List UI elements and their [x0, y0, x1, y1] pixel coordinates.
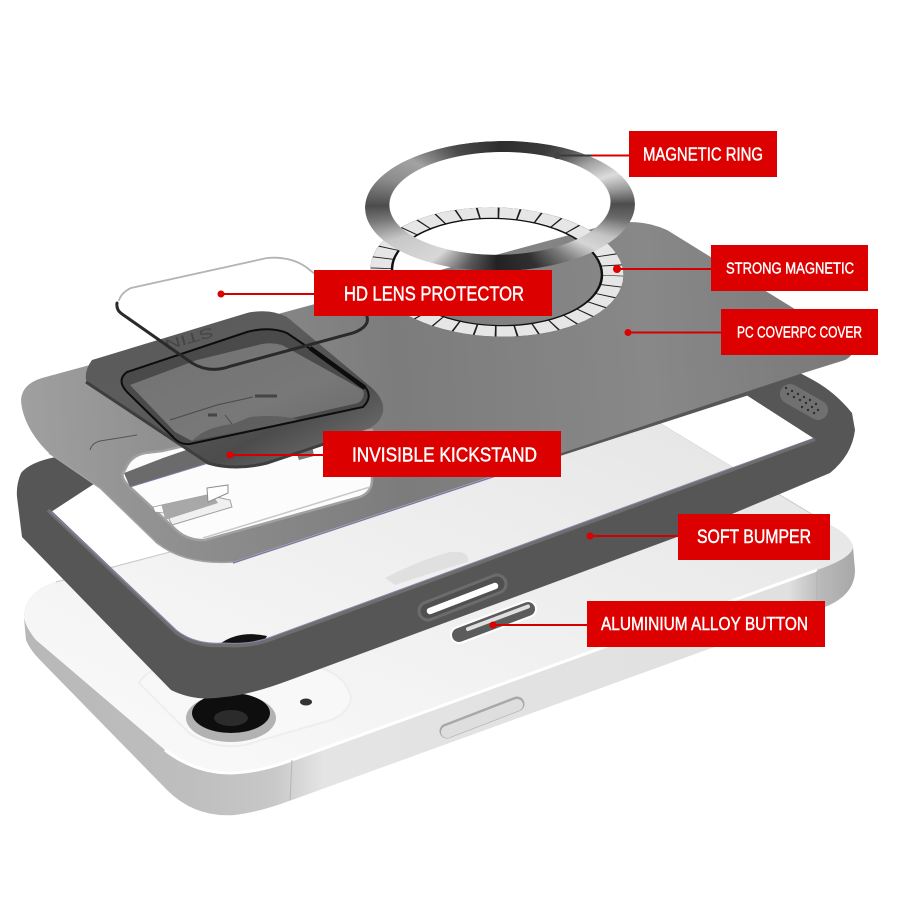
- callout: PC cover: [624, 309, 878, 355]
- bumper inner line: [51, 438, 813, 643]
- camera bump: [139, 668, 351, 746]
- callout: strong magnetic: STRONG MAGNETIC: [726, 260, 854, 278]
- magnetic metal ring: [364, 139, 636, 273]
- side button: [447, 704, 517, 731]
- seams: [290, 571, 817, 800]
- plate lighter edge: [49, 453, 233, 562]
- glass mound: [192, 416, 300, 441]
- edge highlight: [165, 570, 817, 773]
- second lens seen through bumper: [221, 634, 267, 645]
- bumper inner rim: [48, 439, 815, 645]
- phone back face: [24, 423, 853, 773]
- callout: aluminium alloy button: [490, 601, 825, 647]
- flash dot: [300, 698, 312, 706]
- lens ring: [86, 311, 383, 467]
- callout: magnetic ring: [554, 131, 777, 177]
- plate underside edge: [552, 376, 800, 456]
- glass details: [170, 397, 253, 424]
- callout: invisible kickstand: [226, 431, 561, 477]
- white phone: [24, 423, 855, 815]
- callout: PC cover: PC COVERPC COVER: [737, 324, 862, 342]
- plate lower edge thin line: [233, 456, 556, 563]
- window outline: [122, 329, 369, 444]
- far edge outline: [56, 423, 830, 582]
- camera lens: [186, 693, 276, 742]
- kickstand hinge: [153, 485, 232, 525]
- PC cover plate: [21, 222, 852, 563]
- callout: HD lens protector: [218, 270, 552, 316]
- bumper volume slot: [428, 584, 497, 611]
- faint STIN mark: STIN: [163, 324, 216, 353]
- soft bumper: [17, 373, 855, 698]
- ring glass: [130, 343, 364, 441]
- magnet segment ring: [379, 209, 615, 335]
- white gap behind cover at far right: [660, 393, 813, 467]
- glass marks: [208, 396, 277, 415]
- callout: soft bumper: SOFT BUMPER: [697, 527, 811, 548]
- callout: aluminium alloy button: ALUMINIUM ALLOY BUTTON: [601, 614, 808, 634]
- phone body side: [24, 423, 855, 815]
- HD lens protector: [117, 258, 367, 369]
- callout: soft bumper: [586, 514, 830, 560]
- apple logo ghost: [385, 552, 468, 585]
- speaker mesh: [785, 387, 819, 414]
- thick window edge: [310, 348, 365, 388]
- bumper band through cutout: [124, 440, 215, 487]
- kickstand tab: [295, 445, 314, 460]
- camera cutout: [122, 430, 372, 540]
- aluminium alloy button: [459, 606, 528, 635]
- ring lower bevel: [86, 382, 330, 467]
- plate arc mark: [90, 435, 137, 450]
- callout: HD lens protector: HD LENS PROTECTOR: [344, 282, 524, 306]
- callout: strong magnetic: [613, 245, 868, 291]
- band lavender edge: [130, 461, 215, 487]
- callout: invisible kickstand: INVISIBLE KICKSTAND: [352, 444, 537, 466]
- ring window wall: [122, 329, 369, 444]
- cutout inner line: [203, 487, 370, 538]
- callout: magnetic ring: MAGNETIC RING: [643, 144, 763, 164]
